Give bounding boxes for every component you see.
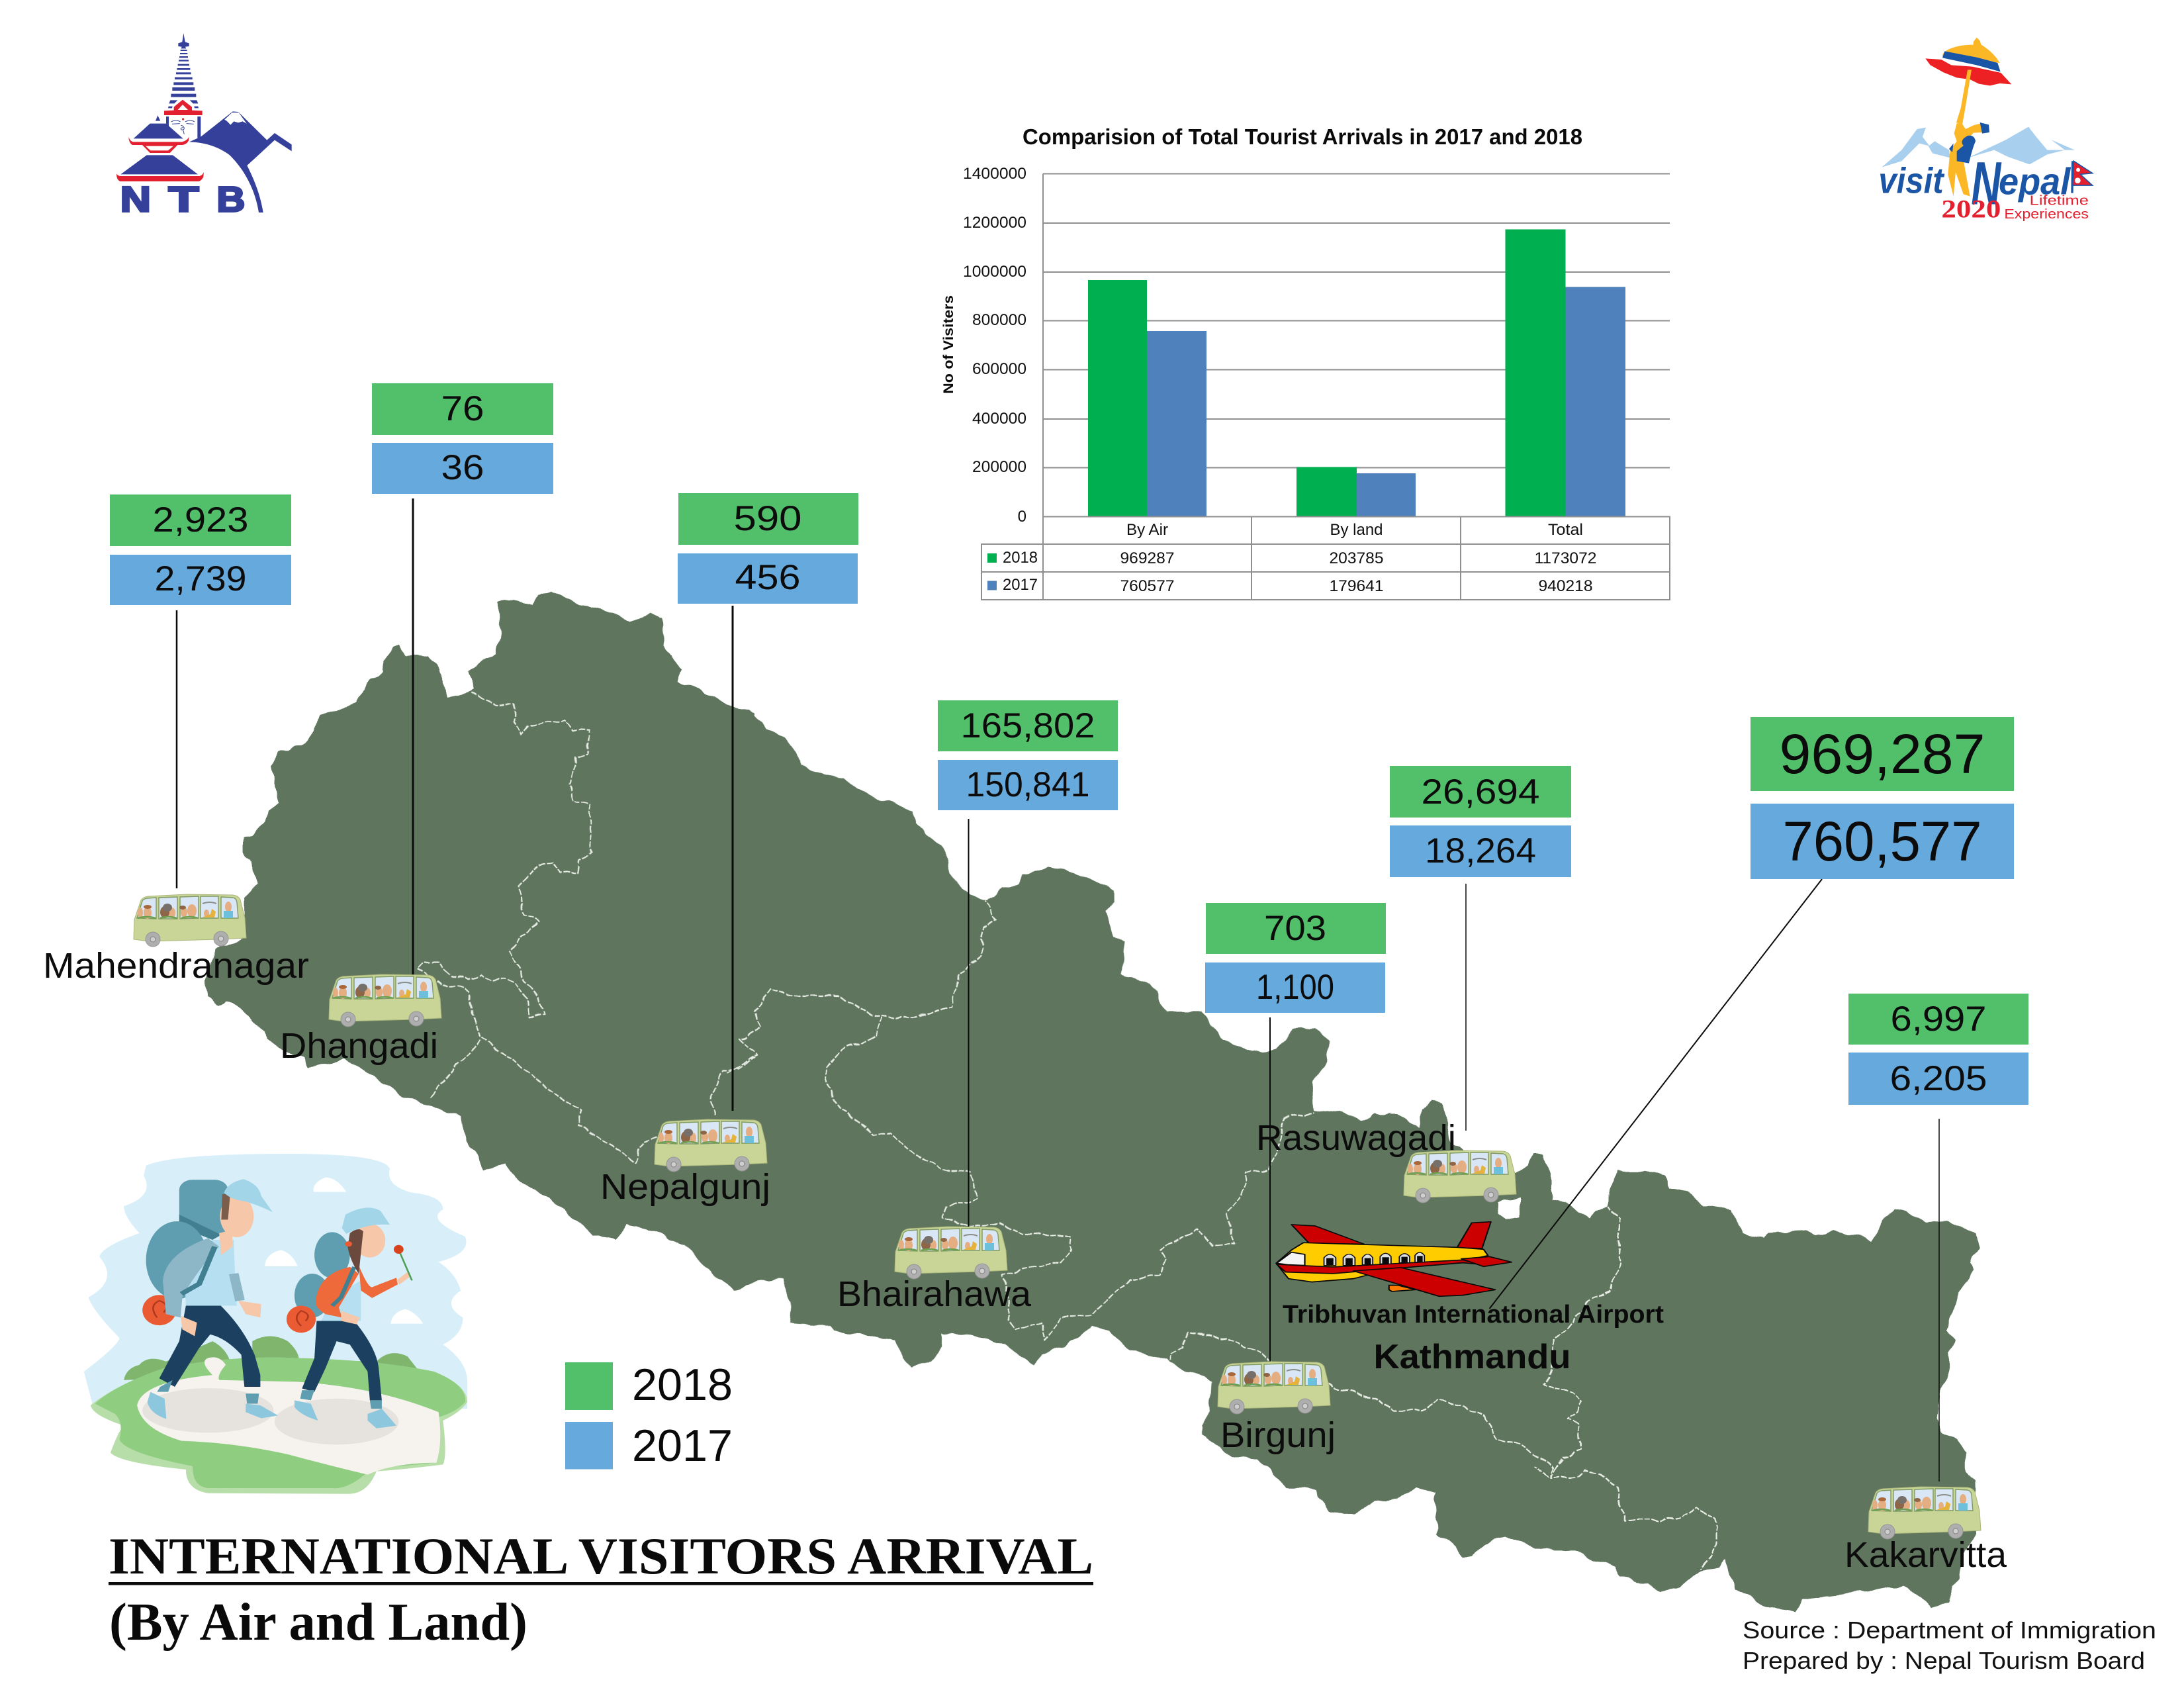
- label: Kathmandu: Kathmandu: [1374, 1338, 1571, 1376]
- logo wordmark: NTB: N: [120, 181, 151, 220]
- data box: Bhairahawa: [938, 700, 1118, 810]
- icon: bus Mahendranagar: [134, 894, 246, 947]
- city labels: Rasuwagadi: [1256, 1118, 1456, 1158]
- city labels: [43, 946, 2007, 1575]
- map of Nepal: [205, 591, 1979, 1611]
- data table: By Air: [1126, 521, 1168, 539]
- data box: Nepalgunj: 590: [733, 499, 802, 538]
- data box: Rasuwagadi: 18,264: [1425, 831, 1536, 870]
- y axis labels: 1200000: [963, 214, 1026, 232]
- y axis labels: 600000: [972, 360, 1026, 378]
- icon: bus Birgunj: [1218, 1362, 1330, 1414]
- data box: Tribhuvan International Airport: 760,577: [1783, 810, 1981, 872]
- data box: Rasuwagadi: [1390, 766, 1571, 877]
- source note: Prepared by : Nepal Tourism Board: [1743, 1647, 2145, 1674]
- icon: bus Rasuwagadi: [1404, 1150, 1516, 1203]
- y axis title: No of Visiters: [941, 295, 956, 394]
- chart title: Comparision of Total Tourist Arrivals in 2017 and 2018: [1023, 124, 1582, 149]
- data box: Kakarvitta: 6,997: [1890, 1000, 1987, 1039]
- logo: Nepal Tourism Board: [116, 33, 292, 220]
- source note: Source : Department of Immigration: [1743, 1617, 2156, 1644]
- title: [109, 1527, 1093, 1652]
- logo: Visit Nepal 2020: 2020: [1941, 194, 2001, 223]
- logo: Visit Nepal 2020: Experiences: [2004, 207, 2089, 222]
- data box: Birgunj: [1205, 903, 1386, 1013]
- data box: Dhangadi: 76: [441, 389, 484, 428]
- leader lines: [177, 498, 1939, 1481]
- city labels: Kakarvitta: [1844, 1535, 2007, 1575]
- legend: 2017: [632, 1421, 733, 1471]
- logo wordmark: NTB: B: [216, 181, 245, 220]
- data box: Rasuwagadi: 26,694: [1422, 773, 1539, 812]
- icon: bus Bhairahawa: [895, 1227, 1007, 1279]
- data box: Tribhuvan International Airport: [1751, 717, 2014, 879]
- data table: 203785: [1329, 549, 1383, 567]
- data table: 940218: [1538, 577, 1592, 595]
- data box: Mahendranagar: 2,739: [155, 559, 246, 598]
- data box: Kakarvitta: 6,205: [1890, 1059, 1987, 1098]
- icon: airplane: [1276, 1222, 1512, 1296]
- data box: Bhairahawa: 150,841: [966, 765, 1089, 804]
- icon: bus Dhangadi: [329, 974, 441, 1027]
- logo: Visit Nepal 2020: Lifetime: [2030, 193, 2089, 208]
- province boundaries: [418, 693, 1716, 1569]
- data box: Nepalgunj: 456: [735, 558, 801, 597]
- bar chart: comparison of tourist arrivals: [941, 124, 1670, 600]
- icon: bus Nepalgunj: [655, 1119, 767, 1172]
- y axis labels: 1400000: [963, 165, 1026, 183]
- bars: 2017: [1147, 287, 1625, 516]
- legend: [565, 1360, 733, 1471]
- y axis labels: [963, 165, 1026, 526]
- data box: Mahendranagar: [110, 494, 291, 605]
- data table: [981, 516, 1670, 600]
- city labels: Birgunj: [1220, 1415, 1336, 1455]
- label: Tribhuvan International Airport: Tribhuvan International Airport: [1283, 1301, 1664, 1329]
- data box: Bhairahawa: 165,802: [961, 706, 1095, 745]
- data box: Birgunj: 703: [1264, 909, 1326, 948]
- logo wordmark: NTB: [120, 181, 245, 220]
- data table: 2018: [1003, 549, 1038, 567]
- y axis labels: 800000: [972, 311, 1026, 329]
- y axis labels: 400000: [972, 410, 1026, 428]
- data box: Dhangadi: 36: [441, 448, 484, 487]
- city labels: Mahendranagar: [43, 946, 309, 986]
- city labels: Nepalgunj: [600, 1167, 770, 1207]
- data table: 760577: [1120, 577, 1174, 595]
- legend: 2018: [632, 1360, 733, 1410]
- data box: Birgunj: 1,100: [1256, 968, 1334, 1007]
- city labels: Dhangadi: [280, 1026, 438, 1066]
- y axis labels: 0: [1018, 508, 1026, 526]
- logo: Visit Nepal 2020: [1878, 38, 2093, 223]
- logo: Visit Nepal 2020: N: [1971, 150, 2002, 217]
- y axis labels: 200000: [972, 458, 1026, 476]
- title: (By Air and Land): [109, 1593, 527, 1652]
- data box: Nepalgunj: [678, 493, 858, 604]
- data box: Mahendranagar: 2,923: [152, 500, 249, 539]
- data box: Tribhuvan International Airport: 969,287: [1779, 723, 1985, 785]
- data table: By land: [1330, 521, 1383, 539]
- source note: [1743, 1617, 2156, 1674]
- data table: Total: [1548, 521, 1583, 539]
- city labels: Bhairahawa: [837, 1274, 1032, 1314]
- data table: 1173072: [1534, 549, 1596, 567]
- data table: 2017: [1003, 576, 1038, 594]
- data box: Dhangadi: [372, 383, 553, 494]
- y axis labels: 1000000: [963, 263, 1026, 281]
- hiker: woman: [287, 1207, 412, 1429]
- data box: Kakarvitta: [1848, 994, 2028, 1105]
- illustration: hikers: [84, 1154, 467, 1494]
- hiker: man: [142, 1179, 278, 1419]
- bars: 2018: [1088, 229, 1566, 516]
- icon: bus Kakarvitta: [1868, 1487, 1981, 1539]
- logo wordmark: NTB: T: [169, 181, 199, 220]
- title: INTERNATIONAL VISITORS ARRIVAL: [109, 1527, 1093, 1585]
- logo: Visit Nepal 2020: epal: [1999, 161, 2071, 203]
- data table: 969287: [1120, 549, 1174, 567]
- data table: 179641: [1329, 577, 1383, 595]
- logo: Visit Nepal 2020: visit: [1878, 160, 1945, 201]
